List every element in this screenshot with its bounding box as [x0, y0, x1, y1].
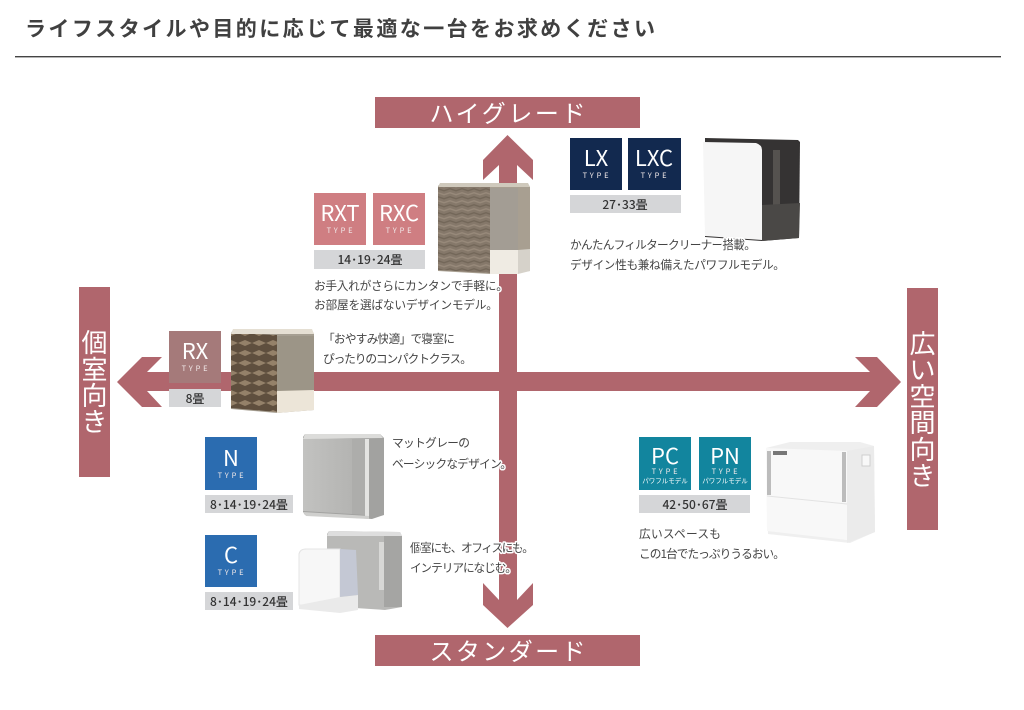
badge: RX: RX	[182, 334, 209, 366]
badge: PC: PC	[651, 439, 679, 471]
axis label: wide spaces: 広	[909, 324, 936, 361]
badge: PC: パワフルモデル	[642, 475, 688, 485]
badge: RX	[169, 331, 221, 383]
description: PC PN	[639, 525, 785, 562]
badge: N	[205, 437, 257, 490]
axis label: wide spaces	[907, 288, 938, 530]
badge: RXC: TYPE	[386, 225, 414, 236]
description: PC PN: この1台でたっぷりうるおい。	[639, 545, 785, 562]
badge: RXT: TYPE	[327, 225, 355, 236]
axis label: standard: スタンダード	[430, 632, 586, 667]
product: C humidifiers	[299, 531, 402, 613]
panel: C	[205, 531, 534, 613]
description: RXT RXC: お手入れがさらにカンタンで手軽に。	[314, 277, 508, 294]
badge: C: C	[224, 538, 238, 570]
size label: C: 8･14･19･24畳	[210, 593, 288, 610]
description: C	[410, 539, 534, 576]
axis label: high grade	[375, 94, 640, 129]
badge: RXC	[373, 193, 425, 245]
badge: PN: PN	[710, 439, 740, 471]
size label: LX LXC: 27･33畳	[602, 196, 648, 213]
badge: RXT: RXT	[320, 196, 360, 228]
product: LX humidifier	[703, 138, 800, 241]
description: C: 個室にも、オフィスにも。	[410, 539, 534, 556]
axis label: wide spaces: き	[909, 456, 936, 493]
description: RXT RXC	[314, 277, 508, 313]
badge: LX: TYPE	[583, 170, 611, 181]
badge: PN: パワフルモデル	[702, 475, 748, 485]
size label: N: 8･14･19･24畳	[210, 496, 288, 513]
title: ライフスタイルや目的に応じて最適な一台をお求めください	[25, 13, 655, 43]
badge: LX	[570, 138, 622, 190]
axis label: private rooms	[79, 287, 110, 477]
size label: RX	[169, 389, 221, 407]
product: N humidifier	[303, 434, 384, 519]
axis label: wide spaces: 間	[909, 403, 936, 440]
badge: LXC	[628, 138, 681, 190]
axis label: wide spaces: 向	[909, 430, 936, 467]
description: N: マットグレーの	[392, 434, 470, 451]
description: C: インテリアになじむ。	[410, 559, 517, 576]
panel: LX LXC	[570, 138, 800, 273]
axis label: wide spaces: い	[909, 350, 936, 387]
badge: LXC: TYPE	[641, 170, 669, 181]
arrow: horizontal axis	[117, 357, 901, 407]
axis label: private rooms: 個	[81, 323, 108, 360]
product: RX humidifier	[231, 329, 314, 413]
badge: RXT	[314, 193, 366, 245]
size label: RXT RXC	[314, 250, 425, 269]
description: RXT RXC: お部屋を選ばないデザインモデル。	[314, 296, 498, 313]
badge: RXC: RXC	[379, 196, 419, 228]
panel: N	[205, 434, 512, 519]
axis label: private rooms: 向	[81, 376, 108, 413]
badge: C: TYPE	[218, 567, 246, 578]
size label: LX LXC	[570, 195, 681, 213]
description: RX	[323, 330, 472, 367]
arrow: vertical axis	[483, 135, 533, 628]
badge: N: N	[223, 441, 239, 473]
description: RX: 「おやすみ快適」で寝室に	[323, 330, 455, 347]
badge: LX: LX	[584, 141, 609, 173]
axis label: wide spaces: 空	[909, 377, 936, 414]
badge: C	[205, 535, 257, 587]
size label: PC PN	[639, 495, 750, 513]
description: LX LXC: かんたんフィルタークリーナー搭載。	[570, 236, 756, 253]
panel: RXT RXC	[314, 183, 530, 313]
description: N	[392, 434, 512, 472]
badge: LXC: LXC	[635, 141, 673, 173]
description: LX LXC	[570, 236, 785, 273]
badge: RX: TYPE	[182, 363, 210, 374]
size label: RX: 8畳	[186, 390, 204, 407]
axis label: private rooms: 室	[81, 350, 108, 387]
badge: N: TYPE	[218, 470, 246, 481]
size label: RXT RXC: 14･19･24畳	[337, 251, 403, 268]
badge: PN	[699, 437, 751, 490]
badge: PC	[639, 437, 691, 490]
badge: PN: TYPE	[712, 466, 740, 477]
description: LX LXC: デザイン性も兼ね備えたパワフルモデル。	[570, 256, 785, 273]
description: N: ベーシックなデザイン。	[392, 455, 512, 472]
axis label: high grade: ハイグレード	[430, 94, 586, 129]
description: PC PN: 広いスペースも	[639, 525, 721, 542]
axis label: standard	[375, 632, 640, 667]
panel: RX	[169, 329, 472, 413]
product: PC humidifier	[766, 442, 875, 543]
size label: PC PN: 42･50･67畳	[662, 496, 728, 513]
description: RX: ぴったりのコンパクトクラス。	[323, 350, 472, 367]
product: RXT humidifier	[438, 183, 530, 274]
panel: PC PN	[639, 437, 875, 562]
badge: PC: TYPE	[652, 466, 680, 477]
axis label: private rooms: き	[81, 402, 108, 439]
